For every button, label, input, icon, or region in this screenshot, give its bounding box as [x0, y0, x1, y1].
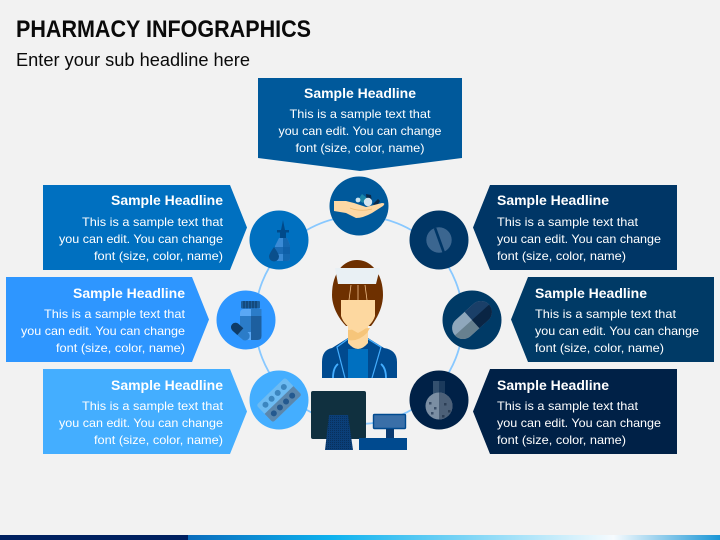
shirt: [348, 349, 368, 378]
panel: top callout: Sample Headline: [304, 86, 417, 101]
panel: lower right callout: font (size, color, name): [497, 433, 626, 447]
panel: top callout: you can edit. You can change: [278, 124, 442, 138]
icon: round tablet: [410, 210, 468, 270]
panel: lower left callout: Sample Headline: [111, 378, 224, 393]
panel: upper right callout: This is a sample text that: [497, 215, 639, 229]
panel: lower right callout: [473, 369, 677, 454]
panel: middle left callout: font (size, color, name): [56, 341, 185, 355]
icon: medicine bottle and capsule: [216, 290, 276, 350]
register stem: [386, 429, 394, 438]
panel: upper left callout: font (size, color, name): [94, 249, 223, 263]
panel: lower left callout: This is a sample text that: [82, 399, 224, 413]
panel: lower right callout: you can edit. You can change: [497, 416, 661, 430]
panel: middle left callout: [6, 277, 209, 362]
panel: top callout: [258, 78, 462, 171]
face: [341, 298, 375, 333]
register screen: [374, 414, 406, 428]
title: PHARMACY INFOGRAPHICS: [16, 16, 311, 43]
cap: [335, 268, 380, 284]
icon: hand holding pills: [330, 176, 388, 236]
monitor stand: [325, 415, 353, 450]
icon: nasal spray bottle: [250, 210, 308, 270]
panel: top callout: font (size, color, name): [296, 141, 424, 155]
monitor: [311, 391, 366, 439]
jacket: [322, 338, 397, 378]
neck shadow: [348, 328, 370, 340]
hair: [332, 260, 383, 326]
icon: capsule: [442, 290, 502, 350]
panel: middle right callout: Sample Headline: [535, 286, 648, 301]
panel: lower right callout: Sample Headline: [497, 378, 610, 393]
illustration: pharmacist: [322, 260, 397, 378]
panel: middle right callout: This is a sample text that: [535, 307, 677, 321]
footer bar: [0, 535, 720, 540]
panel: middle left callout: Sample Headline: [73, 286, 186, 301]
panel: upper left callout: This is a sample text that: [82, 215, 224, 229]
panel: lower right callout: This is a sample text that: [497, 399, 639, 413]
panel: top callout: This is a sample text that: [290, 107, 431, 121]
panel: middle right callout: [511, 277, 714, 362]
icon: blister pack: [250, 370, 308, 430]
panel: middle left callout: This is a sample text that: [44, 307, 186, 321]
panel: middle right callout: you can edit. You can change: [535, 324, 699, 338]
panel: lower left callout: [43, 369, 247, 454]
panel: upper left callout: you can edit. You can change: [59, 232, 223, 246]
panel: middle right callout: font (size, color, name): [535, 341, 664, 355]
subtitle: Enter your sub headline here: [16, 50, 250, 70]
panel: lower left callout: font (size, color, name): [94, 433, 223, 447]
fringe: [338, 283, 378, 300]
panel: upper left callout: [43, 185, 247, 270]
panel: upper right callout: you can edit. You can change: [497, 232, 661, 246]
panel: lower left callout: you can edit. You can change: [59, 416, 223, 430]
illustration: computer and register: [311, 391, 407, 450]
icon: lab flask: [410, 370, 468, 430]
panel: upper left callout: Sample Headline: [111, 193, 224, 208]
panel: upper right callout: Sample Headline: [497, 193, 610, 208]
panel: upper right callout: [473, 185, 677, 270]
connecting ring: [255, 216, 463, 424]
fringe highlights: [349, 285, 367, 300]
neck: [348, 325, 368, 349]
panel: upper right callout: font (size, color, name): [497, 249, 626, 263]
lapels: [337, 339, 381, 378]
panel: middle left callout: you can edit. You can change: [21, 324, 185, 338]
register base: [359, 438, 407, 450]
